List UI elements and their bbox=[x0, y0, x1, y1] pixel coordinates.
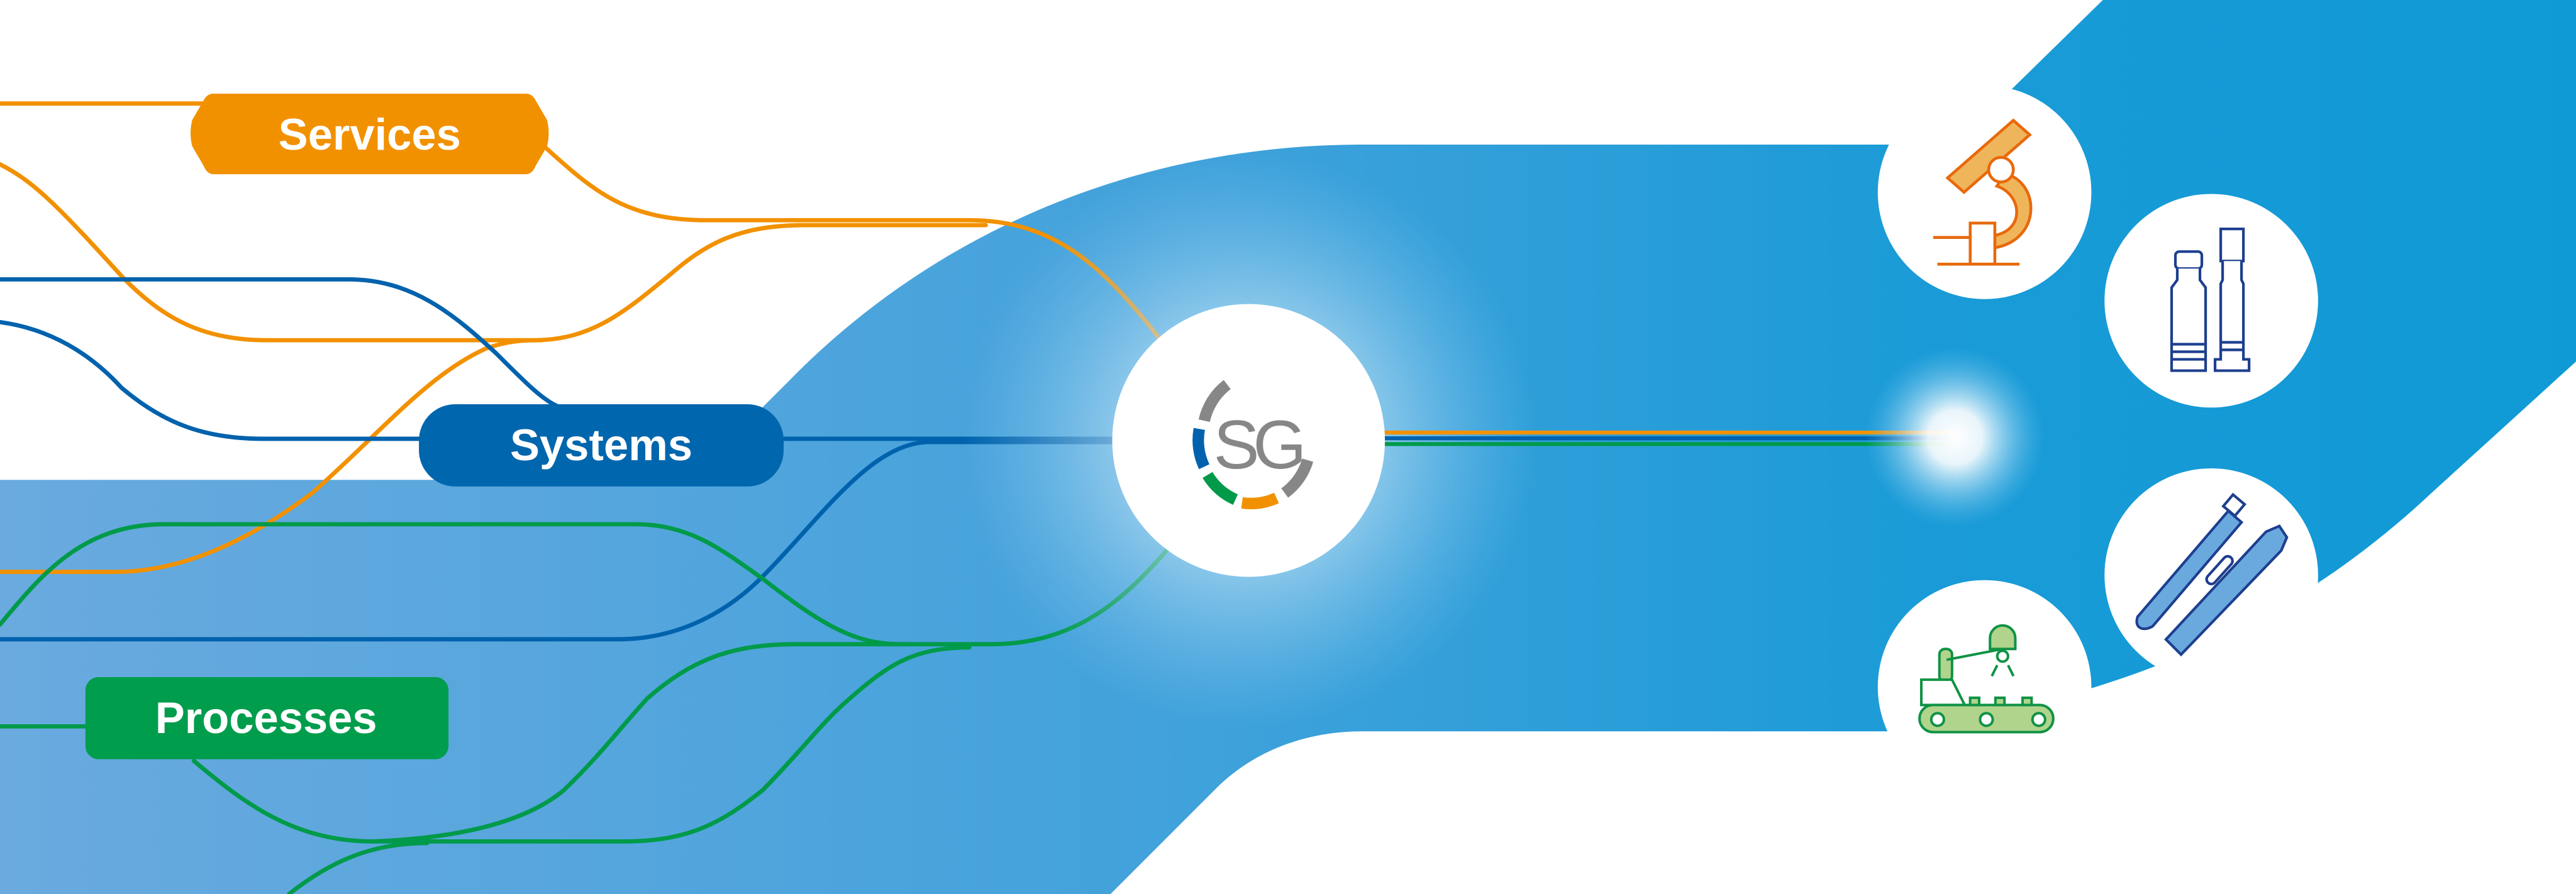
label: Services: Services bbox=[279, 109, 461, 159]
icon circle: injector pens bbox=[2104, 468, 2318, 682]
SG logo circle: SG bbox=[1214, 407, 1302, 483]
label: Systems: Systems bbox=[510, 420, 692, 470]
SG logo circle bbox=[1112, 304, 1385, 577]
glow behind SG bbox=[961, 153, 1536, 728]
label: Processes: Processes bbox=[155, 693, 377, 742]
icon circle: microscope bbox=[1878, 86, 2091, 299]
label: Processes bbox=[86, 677, 448, 759]
right glow bbox=[1865, 347, 2045, 527]
logo gear segments bbox=[1198, 385, 1307, 504]
label: Systems bbox=[419, 404, 784, 487]
blue lines bbox=[0, 279, 1117, 639]
output lines to glow bbox=[1380, 431, 1955, 446]
label: Services bbox=[191, 94, 548, 174]
icon circle: robotic assembly line bbox=[1878, 580, 2091, 794]
connection lines bbox=[0, 104, 1167, 894]
orange lines bbox=[0, 104, 1158, 572]
green lines bbox=[0, 524, 1167, 894]
icon circle: vials bbox=[2104, 194, 2318, 407]
